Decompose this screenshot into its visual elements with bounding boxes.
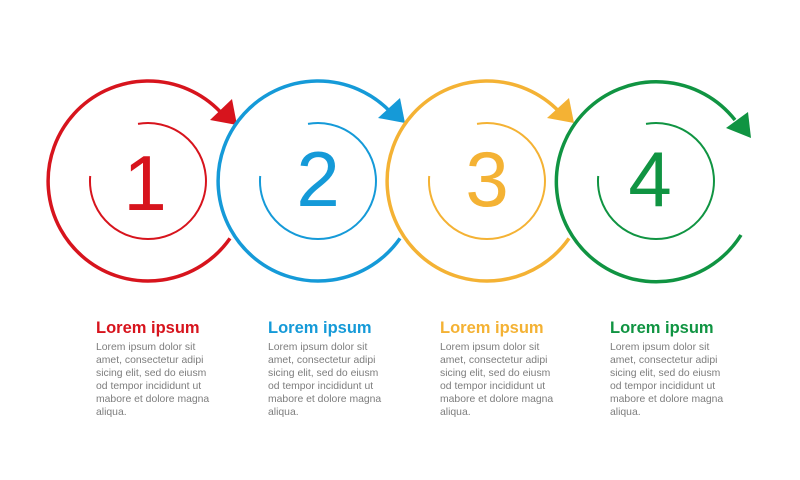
text block 2: aliqua. xyxy=(268,407,299,418)
text block 2: od tempor incididunt ut xyxy=(268,381,373,392)
text block 2: sicing elit, sed do eiusm xyxy=(268,368,378,379)
text block 1 xyxy=(96,319,210,418)
step 2 circle xyxy=(218,81,405,281)
text block 1: od tempor incididunt ut xyxy=(96,381,201,392)
text block 4: aliqua. xyxy=(610,407,641,418)
step 4 circle: 4 xyxy=(628,135,672,223)
step 2 circle: 2 xyxy=(296,135,340,223)
text block 3: Lorem ipsum dolor sit xyxy=(440,342,539,353)
text block 4: mabore et dolore magna xyxy=(610,394,723,405)
step 1 circle xyxy=(48,81,237,281)
text block 3: amet, consectetur adipi xyxy=(440,355,547,366)
text block 2: amet, consectetur adipi xyxy=(268,355,375,366)
text block 2: Lorem ipsum dolor sit xyxy=(268,342,367,353)
text block 1: Lorem ipsum xyxy=(96,319,200,337)
text block 3: od tempor incididunt ut xyxy=(440,381,545,392)
text block 2 xyxy=(268,319,382,418)
text block 3 xyxy=(440,319,554,418)
step 4 circle xyxy=(556,82,751,282)
step 3 circle xyxy=(387,81,574,281)
text block 4: Lorem ipsum dolor sit xyxy=(610,342,709,353)
text block 1: aliqua. xyxy=(96,407,127,418)
step 3 circle: 3 xyxy=(465,135,509,223)
text block 3: aliqua. xyxy=(440,407,471,418)
text block 4: Lorem ipsum xyxy=(610,319,714,337)
text block 2: mabore et dolore magna xyxy=(268,394,381,405)
text block 3: Lorem ipsum xyxy=(440,319,544,337)
text block 4 xyxy=(610,319,724,418)
text block 4: sicing elit, sed do eiusm xyxy=(610,368,720,379)
text block 1: mabore et dolore magna xyxy=(96,394,209,405)
text block 4: od tempor incididunt ut xyxy=(610,381,715,392)
text block 3: sicing elit, sed do eiusm xyxy=(440,368,550,379)
text block 3: mabore et dolore magna xyxy=(440,394,553,405)
text block 4: amet, consectetur adipi xyxy=(610,355,717,366)
text block 2: Lorem ipsum xyxy=(268,319,372,337)
text block 1: sicing elit, sed do eiusm xyxy=(96,368,206,379)
step 1 circle: 1 xyxy=(123,139,167,227)
text block 1: Lorem ipsum dolor sit xyxy=(96,342,195,353)
text block 1: amet, consectetur adipi xyxy=(96,355,203,366)
